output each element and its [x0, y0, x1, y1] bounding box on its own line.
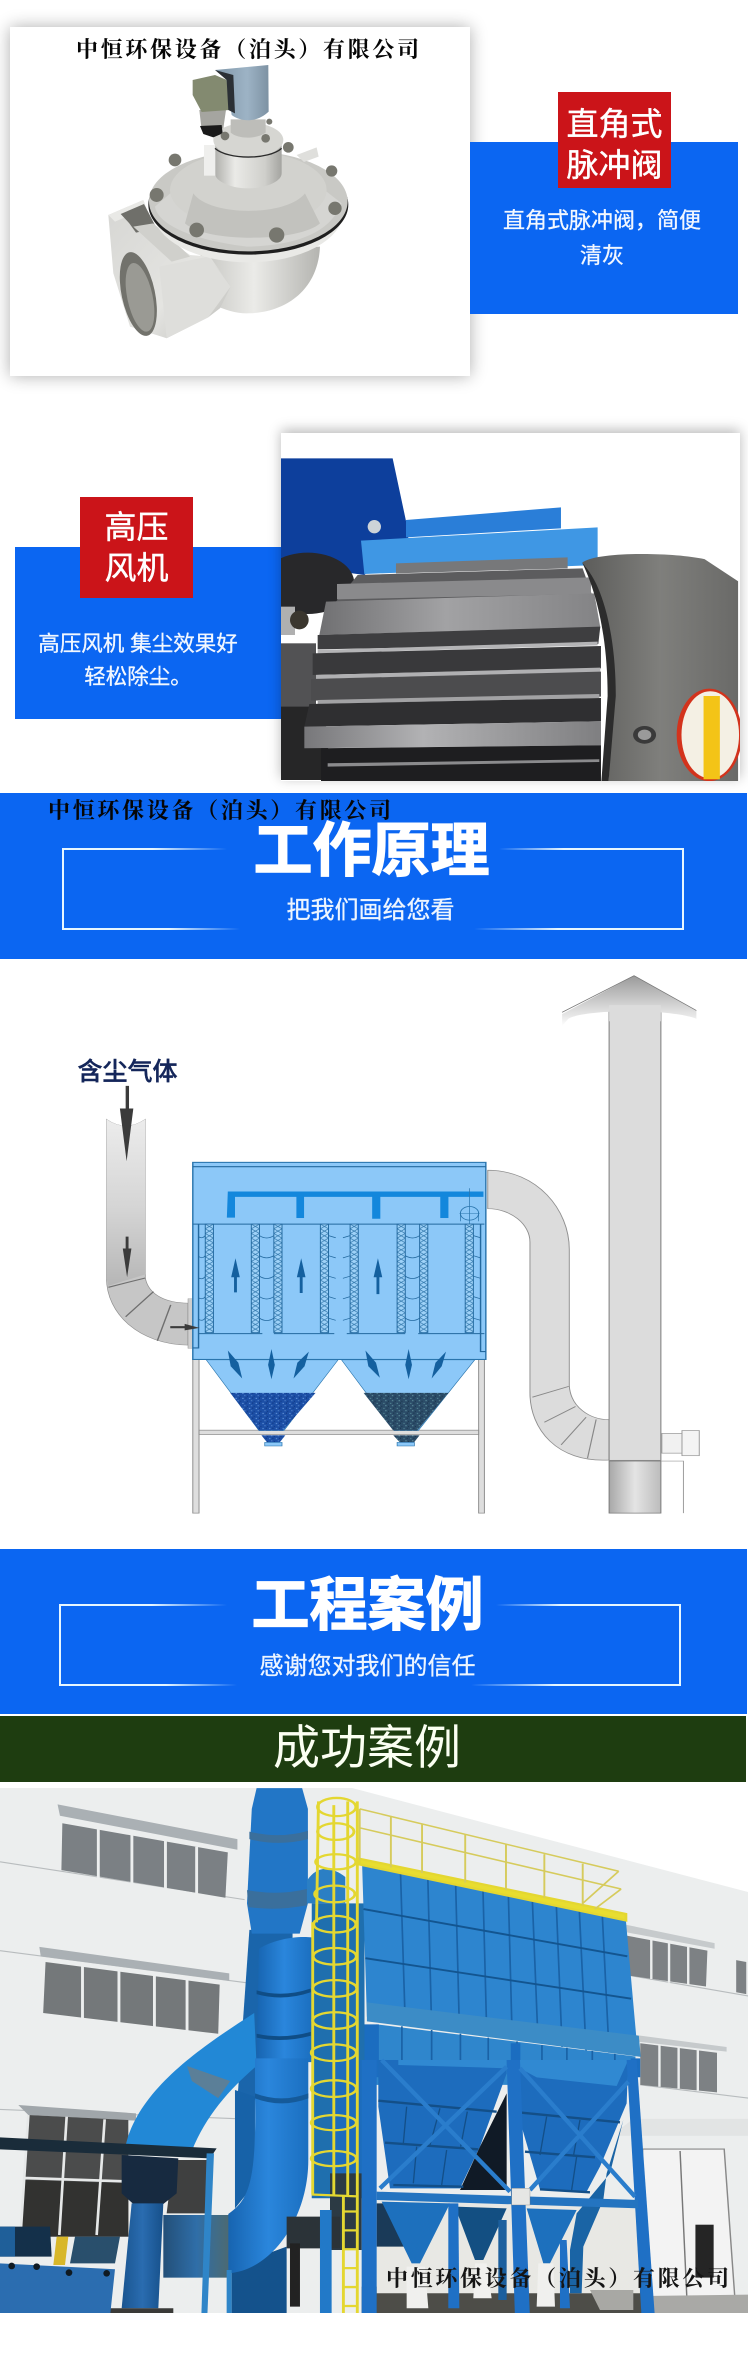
windows [39, 1804, 746, 2092]
fan description: 轻松除尘。 [84, 665, 192, 689]
tag title: 直角式 [566, 106, 662, 142]
valve description: 直角式脉冲阀，简便 [503, 208, 701, 233]
decorative frame [59, 1604, 681, 1686]
heading bar: successful cases [0, 1716, 746, 1782]
valve description [503, 208, 701, 268]
tag title: 高压 [104, 509, 168, 545]
blue text panel [470, 142, 738, 314]
banner title: 工程案例 [251, 1573, 484, 1638]
red title tag [558, 92, 671, 188]
filter housing [193, 1162, 486, 1359]
support legs [193, 1359, 484, 1513]
decorative frame [62, 848, 684, 930]
illustration: pulse valve [108, 65, 348, 338]
tag title [566, 106, 662, 183]
watermark: company name: 中恒环保设备（泊头）有限公司 [48, 798, 394, 823]
photo: installed dust collector [0, 1788, 748, 2313]
watermark: company name on photo: 中恒环保设备（泊头）有限公司 [386, 2266, 732, 2291]
outlet duct [488, 1170, 609, 1460]
lower-left window [18, 2105, 210, 2237]
diagram: dust collector working principle [77, 975, 700, 1514]
panel: high-pressure fan [15, 423, 747, 785]
building wall [0, 1786, 748, 2319]
exhaust stack [562, 976, 699, 1513]
filter bags [205, 1224, 473, 1333]
yellow railing and ladder cage [311, 1798, 626, 2317]
airflow arrows [228, 1258, 446, 1379]
valve description: 清灰 [580, 243, 624, 268]
elbow duct [163, 2058, 308, 2317]
cyclone tower and ducting [126, 1788, 364, 2198]
banner subtitle: 把我们画给您看 [286, 897, 454, 924]
blower fan and canopy [0, 2137, 340, 2317]
label: dusty gas: 含尘气体 [77, 1058, 178, 1086]
red title tag [80, 497, 193, 598]
placard [512, 2188, 530, 2205]
heading text: 成功案例 [273, 1721, 461, 1774]
banner: working principle [0, 793, 747, 959]
tag title: 脉冲阀 [566, 147, 662, 183]
white product card [10, 27, 470, 376]
inlet duct [106, 1119, 194, 1348]
watermark: company name: 中恒环保设备（泊头）有限公司 [76, 37, 422, 62]
cross braces [380, 2060, 635, 2197]
steel columns and beam [362, 2060, 655, 2318]
door and ground [600, 2149, 748, 2319]
bag clamps [199, 1236, 481, 1321]
blue text panel [15, 547, 281, 719]
fan description [38, 632, 238, 689]
motor photo illustration [281, 433, 740, 781]
hoppers, cones and steel frame [330, 2060, 655, 2318]
panel: right-angle pulse valve [0, 17, 738, 386]
collector upper body [362, 1864, 641, 2085]
hoppers [206, 1360, 475, 1446]
tag title [104, 509, 168, 586]
fan description: 高压风机 集尘效果好 [38, 632, 238, 656]
gas arrows [120, 1086, 200, 1330]
banner: project cases [0, 1549, 747, 1714]
internal lines and blow tube [193, 1167, 486, 1352]
banner title: 工作原理 [253, 818, 490, 884]
banner subtitle: 感谢您对我们的信任 [260, 1653, 476, 1680]
tag title: 风机 [104, 550, 168, 586]
